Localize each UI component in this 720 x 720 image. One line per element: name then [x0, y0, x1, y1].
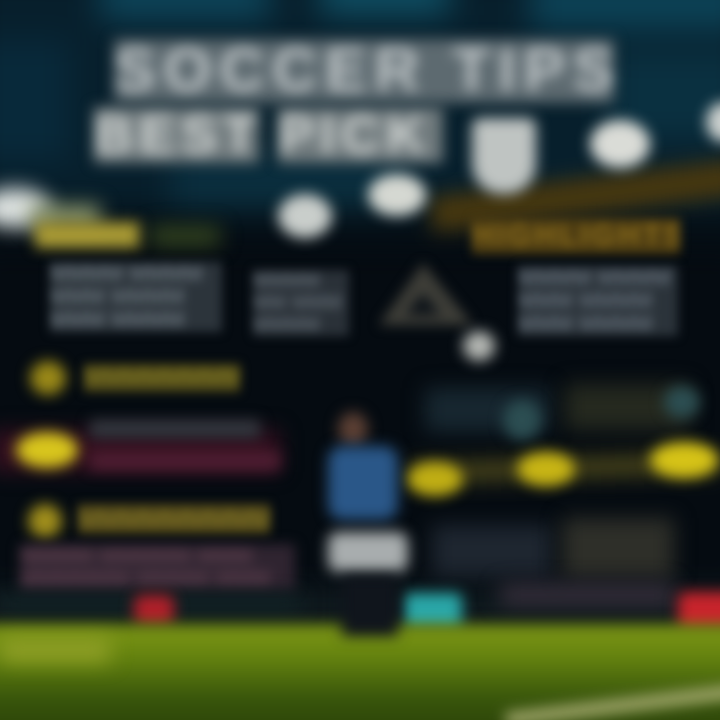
icon: teal mark — [503, 400, 541, 440]
red band left — [0, 430, 280, 472]
pitch white line — [505, 683, 720, 720]
icon: yellow oval two — [517, 452, 575, 486]
icon: yellow oval three — [650, 442, 718, 478]
floodlight streak — [0, 188, 50, 228]
icon: yellow bullet one — [30, 361, 66, 395]
text line grey — [90, 420, 260, 438]
faint green heading — [150, 226, 220, 246]
player — [318, 405, 418, 646]
player shirt — [328, 446, 398, 520]
icon: yellow oval one — [407, 462, 463, 496]
stadium roof — [429, 159, 720, 233]
right text block lower two — [562, 518, 674, 578]
icon: red marker right — [678, 592, 720, 630]
icon: teal mark right — [664, 386, 700, 418]
pitch — [0, 624, 720, 720]
icon: white shield — [472, 118, 536, 194]
floodlight trail — [30, 205, 100, 227]
crowd strip left — [0, 598, 300, 610]
player head — [338, 412, 368, 446]
icon: ball two — [368, 174, 426, 216]
yellow heading left — [35, 222, 140, 248]
icon: ball centre — [463, 331, 495, 361]
yellow band right — [410, 453, 720, 483]
icon: teal box — [404, 593, 462, 629]
icon: triangle — [378, 262, 474, 331]
right text blocks upper — [425, 388, 550, 432]
icon: ball top right — [590, 120, 650, 168]
icon: ball one — [278, 194, 332, 238]
player shorts — [328, 532, 408, 572]
icon: yellow oval left — [16, 432, 78, 468]
right text block lower — [432, 525, 552, 577]
icon: ball at edge — [706, 102, 720, 142]
text line maroon — [90, 452, 280, 470]
player legs — [342, 576, 398, 636]
title — [84, 30, 624, 172]
icon: red marker left — [134, 595, 174, 625]
icon: yellow bullet two — [28, 504, 62, 538]
right text strip — [500, 584, 675, 606]
right text block upper two — [565, 384, 690, 430]
pitch highlights — [0, 638, 110, 662]
